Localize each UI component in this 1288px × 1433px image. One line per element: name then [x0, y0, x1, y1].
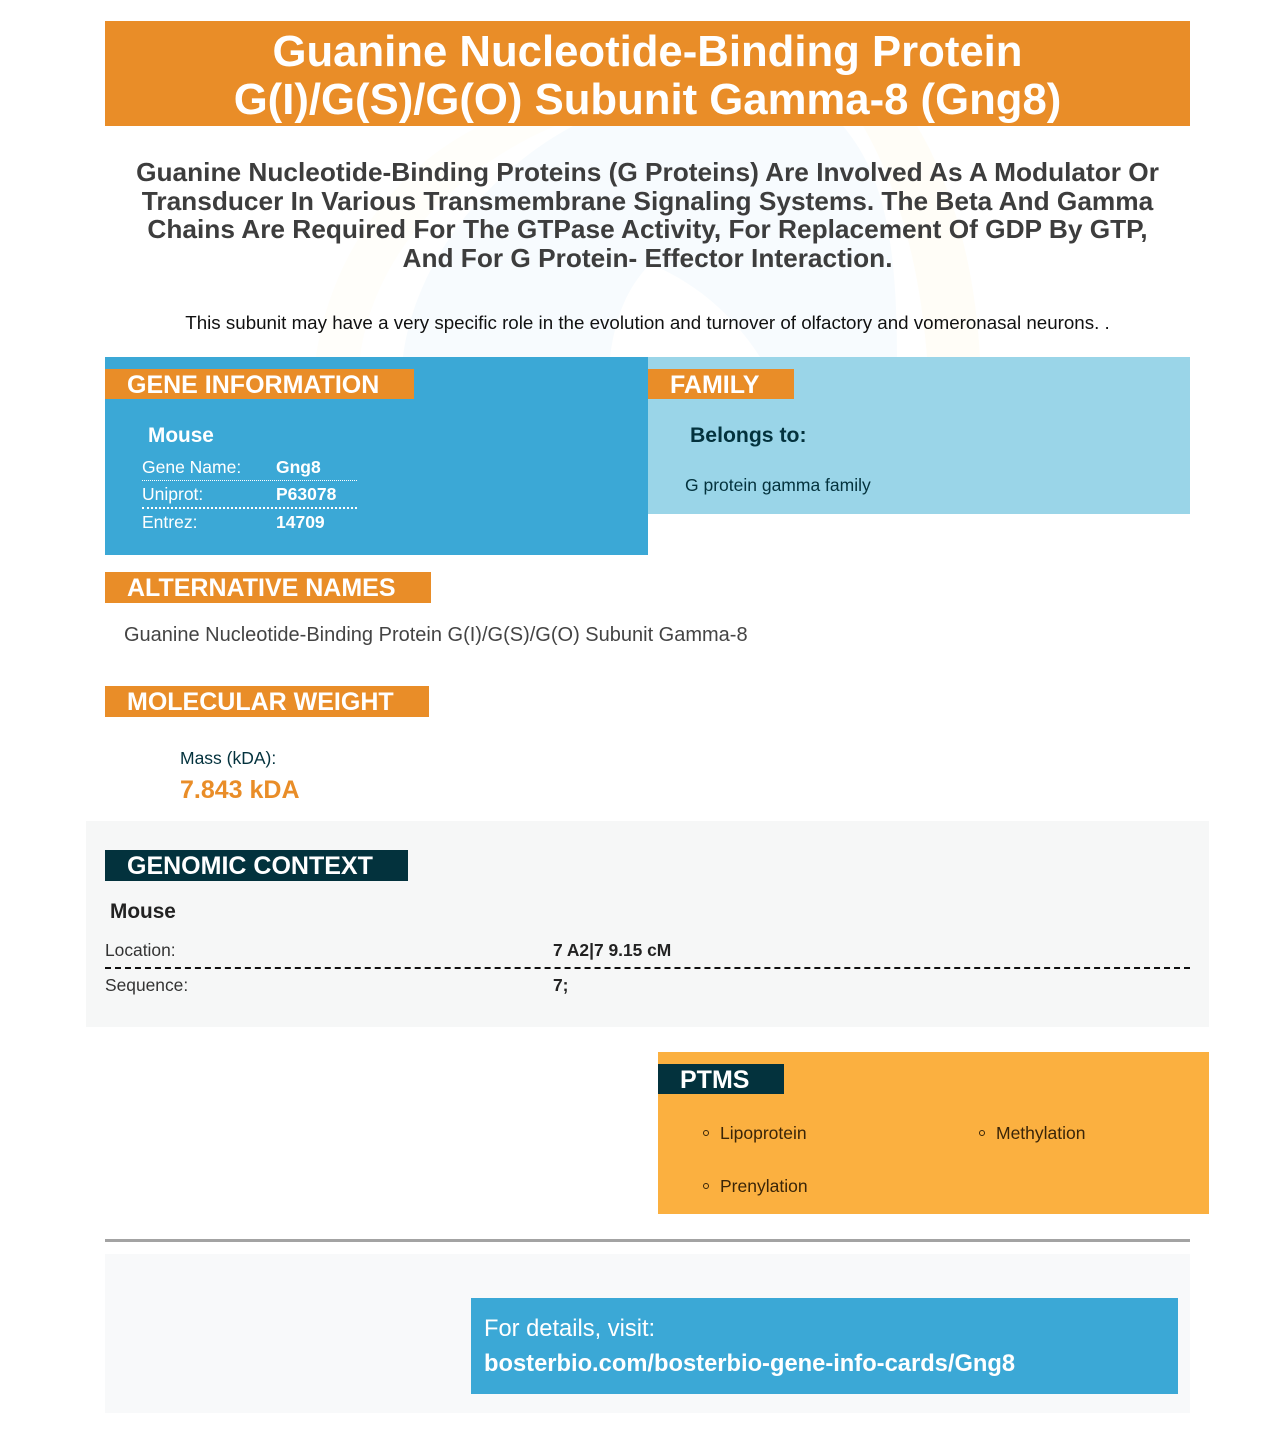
panel: family	[648, 357, 1190, 514]
subtitle: And For G Protein- Effector Interaction.	[402, 243, 893, 273]
subtitle: Guanine Nucleotide-Binding Proteins (G Proteins) Are Involved As A Modulator Or	[136, 157, 1159, 187]
sequence row: Sequence:	[105, 975, 188, 995]
sequence row	[105, 975, 568, 995]
uniprot row	[142, 482, 357, 509]
mass value: 7.843 kDA	[180, 776, 300, 804]
panel: footer	[105, 1254, 1190, 1413]
title banner: Guanine Nucleotide-Binding Protein	[272, 27, 1022, 76]
subtitle: Transducer In Various Transmembrane Signaling Systems. The Beta And Gamma	[142, 186, 1153, 216]
heading: gene information: GENE INFORMATION	[127, 371, 379, 399]
panel: ptms	[658, 1052, 1209, 1214]
entrez row: Entrez:	[142, 512, 197, 532]
sequence row: 7;	[553, 975, 568, 995]
location row: Location:	[105, 940, 176, 960]
description: This subunit may have a very specific role in the evolution and turnover of olfactory and vomeronasal neurons. .	[185, 312, 1110, 333]
entrez row	[142, 512, 325, 532]
ptm: lipoprotein: Lipoprotein	[720, 1123, 807, 1143]
alternative names text: Guanine Nucleotide-Binding Protein G(I)/G(S)/G(O) Subunit Gamma-8	[124, 624, 748, 646]
heading: family: FAMILY	[670, 371, 759, 399]
heading: genomic context: GENOMIC CONTEXT	[127, 852, 373, 880]
gene name row: Gng8	[276, 457, 321, 477]
subtitle: Chains Are Required For The GTPase Activity, For Replacement Of GDP By GTP,	[147, 214, 1148, 244]
heading: alternative names: ALTERNATIVE NAMES	[127, 574, 396, 602]
organism label: Mouse	[110, 900, 176, 923]
entrez row: 14709	[276, 512, 325, 532]
callout: details link	[471, 1298, 1178, 1394]
location row	[105, 938, 1190, 969]
callout label: For details, visit:	[484, 1316, 655, 1342]
ptm: methylation: Methylation	[996, 1123, 1086, 1143]
title banner: G(I)/G(S)/G(O) Subunit Gamma-8 (Gng8)	[234, 75, 1061, 124]
callout url: bosterbio.com/bosterbio-gene-info-cards/Gng8	[484, 1351, 1015, 1377]
panel: genomic context	[86, 821, 1209, 1027]
uniprot row: P63078	[276, 484, 336, 504]
gene name row: Gene Name:	[142, 457, 241, 477]
watermark logo	[300, 126, 1000, 357]
heading: family	[648, 369, 794, 399]
belongs to label: Belongs to:	[690, 424, 807, 447]
subtitle	[136, 157, 1159, 273]
uniprot row: Uniprot:	[142, 484, 203, 504]
ptm: prenylation: Prenylation	[720, 1176, 808, 1196]
location row: 7 A2|7 9.15 cM	[553, 940, 671, 960]
heading: molecular weight: MOLECULAR WEIGHT	[127, 688, 394, 716]
organism label: Mouse	[148, 424, 214, 447]
title banner	[105, 21, 1190, 126]
family name: G protein gamma family	[685, 475, 871, 495]
gene name row	[142, 455, 357, 481]
panel: gene information	[105, 357, 648, 555]
mass label: Mass (kDA):	[180, 748, 276, 768]
heading: ptms	[658, 1064, 784, 1094]
heading: ptms: PTMS	[680, 1066, 749, 1094]
